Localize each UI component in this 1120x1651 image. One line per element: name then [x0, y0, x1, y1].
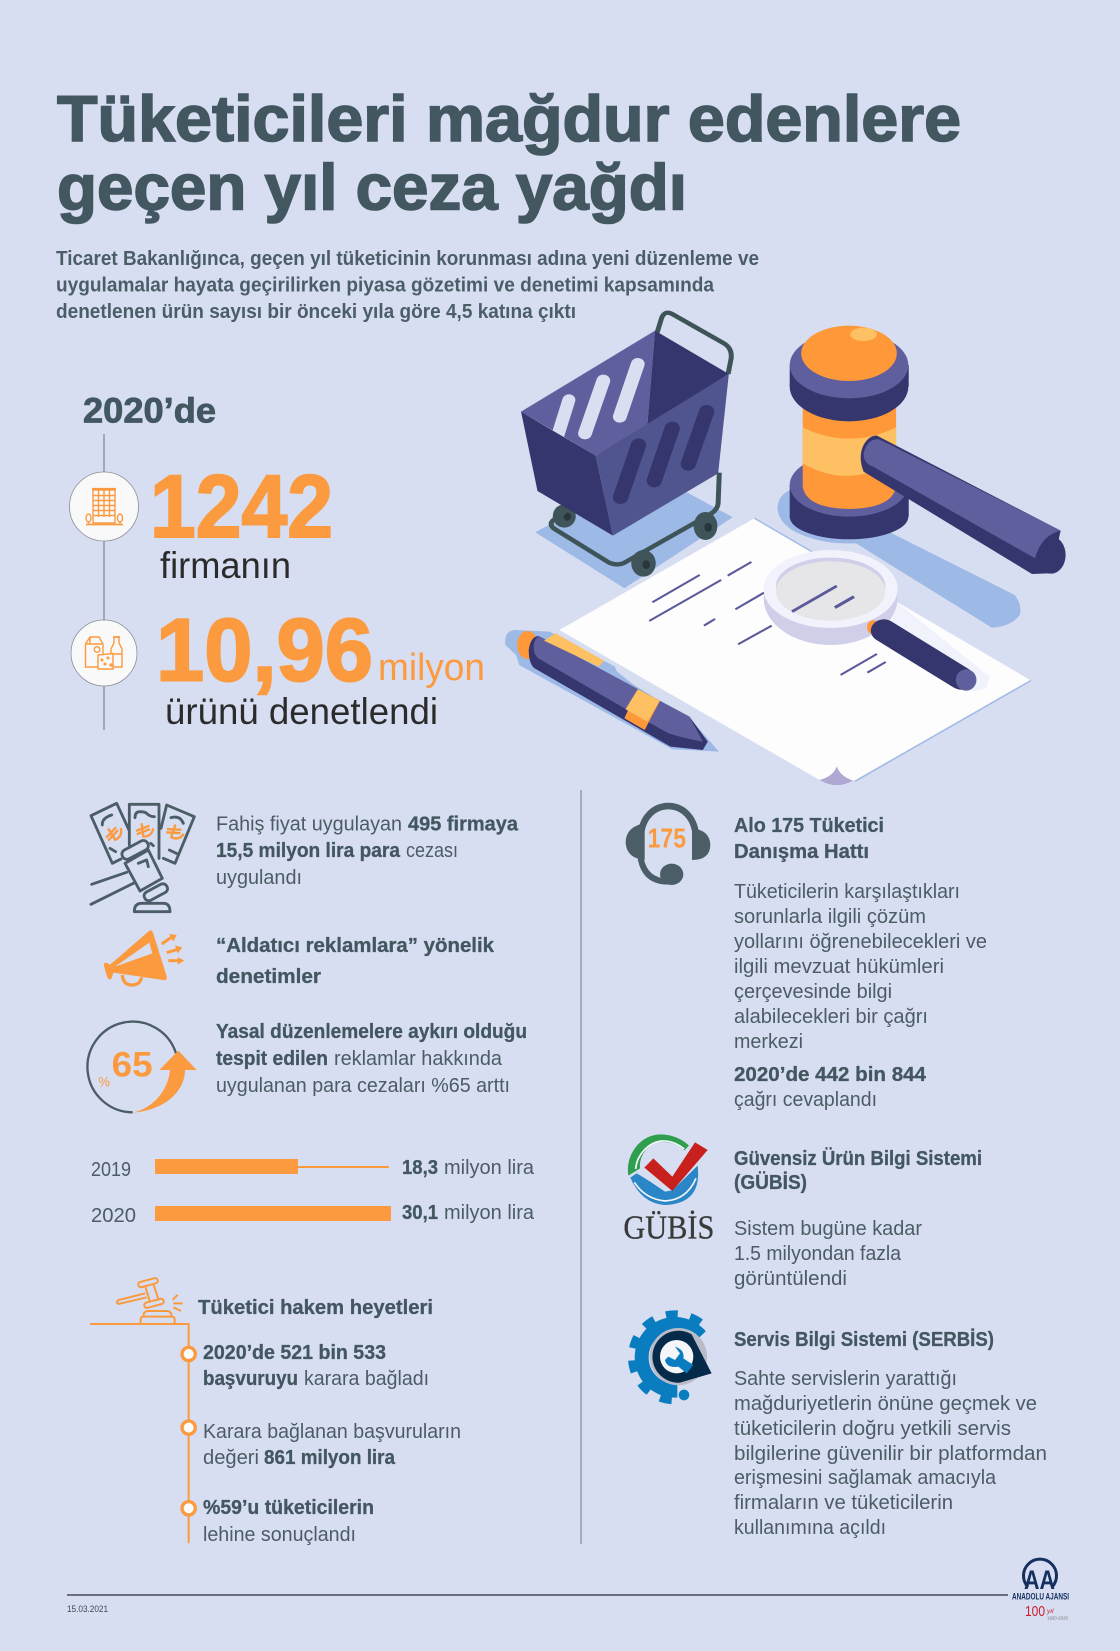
icon: 65 percent increase: % — [98, 1074, 110, 1090]
text: calls answered: 2020’de 442 bin 844 — [734, 1063, 927, 1086]
panel: GÜBİS — [623, 1134, 982, 1290]
logo: Anadolu Ajansı: yıl — [1046, 1608, 1054, 1615]
text: value of decisions — [203, 1420, 461, 1469]
illustration: gavel — [777, 326, 1066, 628]
heading: GÜBİS — [734, 1147, 982, 1194]
text: price gouging fines — [216, 812, 519, 889]
panel: SERBİS — [632, 1314, 1047, 1539]
text: GÜBİS description — [734, 1217, 922, 1290]
label: firmanın: firmanın — [160, 545, 291, 586]
text: misleading ads — [216, 934, 495, 988]
panel: Alo 175 — [626, 806, 987, 1111]
bar chart: fines 2019 vs 2020: 2020 — [91, 1204, 136, 1227]
text: price gouging fines: 495 firmaya — [408, 812, 519, 836]
icon: 65 percent increase — [87, 1022, 197, 1113]
logo: Anadolu Ajansı — [1012, 1559, 1069, 1620]
intro text: uygulamalar hayata geçirilirken piyasa gözetimi ve denetimi kapsamında — [56, 274, 715, 296]
text: price gouging fines: Fahiş fiyat uygulayan — [216, 812, 402, 836]
text: value of decisions: değeri — [203, 1446, 259, 1469]
illustration: cart, gavel, document, magnifier, pen — [505, 313, 1066, 785]
text: price gouging fines: uygulandı — [216, 866, 302, 889]
figure: 10,96 milyon: 10,96 — [156, 600, 373, 700]
text: hotline description: yollarını öğrenebilecekleri ve — [734, 930, 987, 953]
text: hotline description: merkezi — [734, 1030, 803, 1053]
text: SERBİS description: bilgilerine güvenilir bir platformdan — [734, 1442, 1047, 1465]
illustration: cart — [521, 313, 733, 588]
bar chart: fines 2019 vs 2020: 18,3 — [402, 1156, 438, 1179]
heading: Tüketici hakem heyetleri: Tüketici hakem heyetleri — [198, 1296, 433, 1319]
text: SERBİS description: mağduriyetlerin önüne geçmek ve — [734, 1392, 1037, 1415]
heading: SERBİS: Servis Bilgi Sistemi (SERBİS) — [734, 1328, 994, 1351]
text: price gouging fines: cezası — [406, 839, 458, 862]
text: SERBİS description: kullanımına açıldı — [734, 1516, 886, 1539]
title: geçen yıl ceza yağdı — [57, 150, 687, 224]
intro text: Ticaret Bakanlığınca, geçen yıl tüketicinin korunması adına yeni düzenleme ve — [56, 248, 759, 270]
heading: Alo 175: Alo 175 Tüketici — [734, 814, 884, 837]
text: GÜBİS description: 1.5 milyondan fazla — [734, 1242, 902, 1265]
heading: GÜBİS: (GÜBİS) — [734, 1171, 807, 1194]
text: SERBİS description: Sahte servislerin yarattığı — [734, 1367, 957, 1390]
text: fines rose 65 percent: uygulanan para cezaları %65 arttı — [216, 1074, 510, 1097]
text: calls answered: çağrı cevaplandı — [734, 1088, 877, 1111]
text: fines rose 65 percent: tespit edilen — [216, 1047, 328, 1070]
heading: Alo 175 — [734, 814, 884, 863]
illustration: pen — [505, 630, 719, 752]
figure: 10,96 milyon: milyon — [378, 647, 485, 689]
icon: SERBİS gear logo — [632, 1314, 727, 1412]
text: value of decisions: 861 milyon lira — [264, 1446, 396, 1469]
text: hotline description — [734, 880, 987, 1053]
text: misleading ads: denetimler — [216, 965, 321, 988]
text: price gouging fines: 15,5 milyon lira para — [216, 839, 401, 862]
text: hotline description: alabilecekleri bir çağrı — [734, 1005, 928, 1028]
text: SERBİS description: firmaların ve tüketicilerin — [734, 1491, 953, 1514]
text: applications decided — [203, 1341, 429, 1390]
icon: 65 percent increase: 65 — [112, 1046, 153, 1085]
bar chart: fines 2019 vs 2020: milyon lira — [444, 1156, 535, 1179]
logo: Anadolu Ajansı: 100 — [1025, 1603, 1045, 1620]
title — [57, 82, 961, 224]
text: fines rose 65 percent: Yasal düzenlemelere aykırı olduğu — [216, 1020, 527, 1043]
text: 59 percent in favour: lehine sonuçlandı — [203, 1523, 356, 1546]
logo: Anadolu Ajansı: ANADOLU AJANSI — [1012, 1592, 1069, 1602]
text: hotline description: çerçevesinde bilgi — [734, 980, 892, 1003]
illustration: document — [559, 518, 1031, 785]
text: SERBİS description — [734, 1367, 1047, 1539]
text: hotline description: Tüketicilerin karşılaştıkları — [734, 880, 960, 903]
bar chart: fines 2019 vs 2020: 30,1 — [402, 1201, 438, 1224]
icon: office building — [70, 472, 138, 541]
text: calls answered — [734, 1063, 927, 1111]
illustration: magnifier — [764, 550, 990, 692]
icon: headset 175: 175 — [648, 823, 686, 854]
figure: 1242: 1242 — [150, 456, 333, 556]
icon: GÜBİS logo — [623, 1134, 714, 1246]
icon: grocery products — [71, 620, 137, 686]
text: SERBİS description: tüketicilerin doğru yetkili servis — [734, 1417, 1011, 1440]
text: hotline description: sorunlarla ilgili çözüm — [734, 905, 926, 928]
text: hotline description: ilgili mevzuat hükümleri — [734, 955, 944, 978]
figure: 10,96 milyon — [156, 600, 485, 700]
intro text — [56, 248, 759, 323]
panel: fines and advertising — [87, 803, 535, 1227]
footer — [67, 1559, 1069, 1620]
heading: GÜBİS: Güvensiz Ürün Bilgi Sistemi — [734, 1147, 982, 1170]
text: applications decided: başvuruyu — [203, 1367, 298, 1390]
icon: headset 175 — [626, 806, 710, 885]
panel: consumer arbitration committees — [90, 1278, 461, 1546]
date: 15.03.2021 — [67, 1604, 108, 1615]
icon: megaphone — [104, 930, 184, 985]
heading: Alo 175: Danışma Hattı — [734, 840, 869, 863]
text: fines rose 65 percent — [216, 1020, 527, 1097]
text: GÜBİS description: görüntülendi — [734, 1267, 847, 1290]
text: applications decided: 2020’de 521 bin 533 — [203, 1341, 386, 1364]
logo: Anadolu Ajansı: AA — [1024, 1565, 1055, 1595]
text: SERBİS description: erişmesini sağlamak amacıyla — [734, 1466, 997, 1489]
title: Tüketicileri mağdur edenlere — [57, 82, 961, 155]
label: ürünü denetlendi: ürünü denetlendi — [165, 691, 438, 732]
panel: 2020 stats — [70, 392, 485, 732]
logo: Anadolu Ajansı: 1920-2020 — [1047, 1616, 1068, 1620]
heading: 2020'de: 2020’de — [83, 392, 216, 430]
icon: orange gavel with timeline — [90, 1278, 195, 1543]
text: applications decided: karara bağladı — [304, 1367, 429, 1390]
text: fines rose 65 percent: reklamlar hakkında — [334, 1047, 503, 1070]
bar chart: fines 2019 vs 2020: milyon lira — [444, 1201, 535, 1224]
icon: money and gavel — [91, 803, 194, 912]
text: value of decisions: Karara bağlanan başvuruların — [203, 1420, 461, 1443]
text: misleading ads: “Aldatıcı reklamlara” yönelik — [216, 934, 495, 957]
icon: GÜBİS logo: GÜBİS — [623, 1209, 714, 1246]
text: 59 percent in favour — [203, 1496, 374, 1546]
intro text: denetlenen ürün sayısı bir önceki yıla göre 4,5 katına çıktı — [56, 301, 576, 323]
text: 59 percent in favour: %59’u tüketicilerin — [203, 1496, 374, 1519]
bar chart: fines 2019 vs 2020 — [91, 1156, 535, 1227]
text: GÜBİS description: Sistem bugüne kadar — [734, 1217, 922, 1240]
bar chart: fines 2019 vs 2020: 2019 — [91, 1158, 131, 1181]
divider — [580, 790, 582, 1544]
